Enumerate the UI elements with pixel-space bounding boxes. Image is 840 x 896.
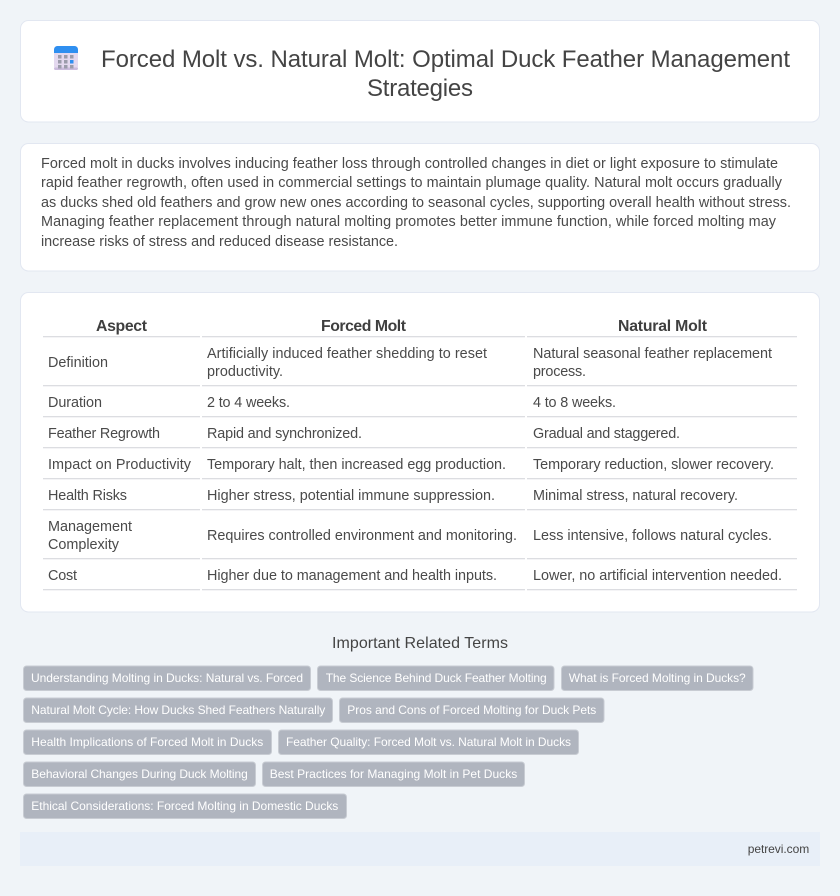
table row: health risks: Minimal stress, natural recovery. — [533, 488, 738, 504]
table row: definition: Natural seasonal feather replacement — [533, 346, 772, 362]
tag: best practices — [262, 762, 524, 786]
table row: management complexity: Requires controlled environment and monitoring. — [207, 528, 517, 544]
table row: definition: Definition — [48, 355, 108, 371]
text block: introduction paragraph: rapid feather regrowth, often used in commercial settings to maintain plumage quality. Natural molt occurs gradually — [41, 175, 783, 191]
table row: health risks: Health Risks — [48, 488, 127, 504]
table row: feather regrowth — [48, 426, 680, 442]
text block: introduction paragraph: Forced molt in ducks involves inducing feather loss through controlled changes in diet or light exposure to stimulate — [41, 156, 778, 172]
tag: health implications: Health Implications of Forced Molt in Ducks — [31, 735, 263, 749]
table row: feather regrowth: Gradual and staggered. — [533, 426, 680, 442]
title: Strategies — [367, 75, 473, 102]
table row: cost: Lower, no artificial intervention needed. — [533, 568, 782, 584]
table row: impact on productivity: Impact on Productivity — [48, 457, 192, 473]
table row: health risks: Higher stress, potential immune suppression. — [207, 488, 495, 504]
tag: understanding molting: Understanding Molting in Ducks: Natural vs. Forced — [31, 671, 303, 685]
table row: health risks — [48, 488, 738, 504]
title — [101, 46, 790, 102]
text block: introduction paragraph — [41, 156, 791, 250]
table row: cost: Higher due to management and health inputs. — [207, 568, 497, 584]
table row: duration: 2 to 4 weeks. — [207, 395, 290, 411]
table row: management complexity: Less intensive, follows natural cycles. — [533, 528, 772, 544]
related terms tags — [24, 666, 753, 818]
tag: science behind molting: The Science Behind Duck Feather Molting — [326, 671, 547, 685]
table row: impact on productivity — [48, 457, 774, 473]
title: Forced Molt vs. Natural Molt: Optimal Duck Feather Management — [101, 46, 790, 73]
table row: impact on productivity: Temporary halt, then increased egg production. — [207, 457, 506, 473]
table row: management complexity: Management — [48, 519, 132, 535]
footer — [20, 832, 820, 866]
panel: comparison table — [20, 292, 820, 612]
tag: understanding molting — [24, 666, 310, 690]
icon: calendar — [54, 46, 78, 70]
tag: natural molt cycle: Natural Molt Cycle: How Ducks Shed Feathers Naturally — [31, 703, 325, 717]
table header row — [96, 318, 708, 335]
tag: best practices: Best Practices for Managing Molt in Pet Ducks — [270, 767, 517, 781]
table row: duration — [48, 395, 616, 411]
tag: feather quality: Feather Quality: Forced Molt vs. Natural Molt in Ducks — [286, 735, 571, 749]
tag: behavioral changes: Behavioral Changes During Duck Molting — [31, 767, 248, 781]
table row: definition: productivity. — [207, 364, 283, 380]
table row: management complexity: Complexity — [48, 537, 120, 553]
table row: definition — [48, 346, 772, 380]
table row: cost: Cost — [48, 568, 77, 584]
table row: cost — [48, 568, 782, 584]
table row: definition: process. — [533, 364, 586, 380]
heading: important related terms: Important Related Terms — [332, 635, 508, 652]
table row: feather regrowth: Feather Regrowth — [48, 426, 160, 442]
tag: what is forced molting — [562, 666, 753, 690]
text block: introduction paragraph: Managing feather replacement through natural molting promotes better immune function, while forced molting may — [41, 214, 777, 230]
tag: ethical considerations — [24, 794, 346, 818]
table row: management complexity — [48, 519, 772, 553]
table row: duration: 4 to 8 weeks. — [533, 395, 616, 411]
tag: feather quality — [278, 730, 578, 754]
footer: petrevi.com — [748, 842, 809, 856]
tag: pros and cons — [340, 698, 604, 722]
table header row: Natural Molt — [618, 318, 708, 335]
table row: impact on productivity: Temporary reduction, slower recovery. — [533, 457, 774, 473]
tag: pros and cons: Pros and Cons of Forced Molting for Duck Pets — [347, 703, 596, 717]
table row: duration: Duration — [48, 395, 102, 411]
table row: feather regrowth: Rapid and synchronized. — [207, 426, 362, 442]
text block: introduction paragraph: increase risks of stress and reduced disease resistance. — [41, 234, 398, 250]
tag: what is forced molting: What is Forced Molting in Ducks? — [569, 671, 746, 685]
panel: introduction — [20, 144, 820, 271]
text block: introduction paragraph: as ducks shed old feathers and grow new ones according to seasonal cycles, supporting overall health without stress. — [41, 195, 791, 211]
table row: definition: Artificially induced feather shedding to reset — [207, 346, 487, 362]
panel: header — [20, 20, 820, 122]
tag: behavioral changes — [24, 762, 256, 786]
tag: ethical considerations: Ethical Considerations: Forced Molting in Domestic Ducks — [31, 799, 338, 813]
tag: health implications — [24, 730, 272, 754]
tag: natural molt cycle — [24, 698, 332, 722]
table header row: Aspect — [96, 318, 148, 335]
table header row: Forced Molt — [321, 318, 407, 335]
tag: science behind molting — [318, 666, 554, 690]
